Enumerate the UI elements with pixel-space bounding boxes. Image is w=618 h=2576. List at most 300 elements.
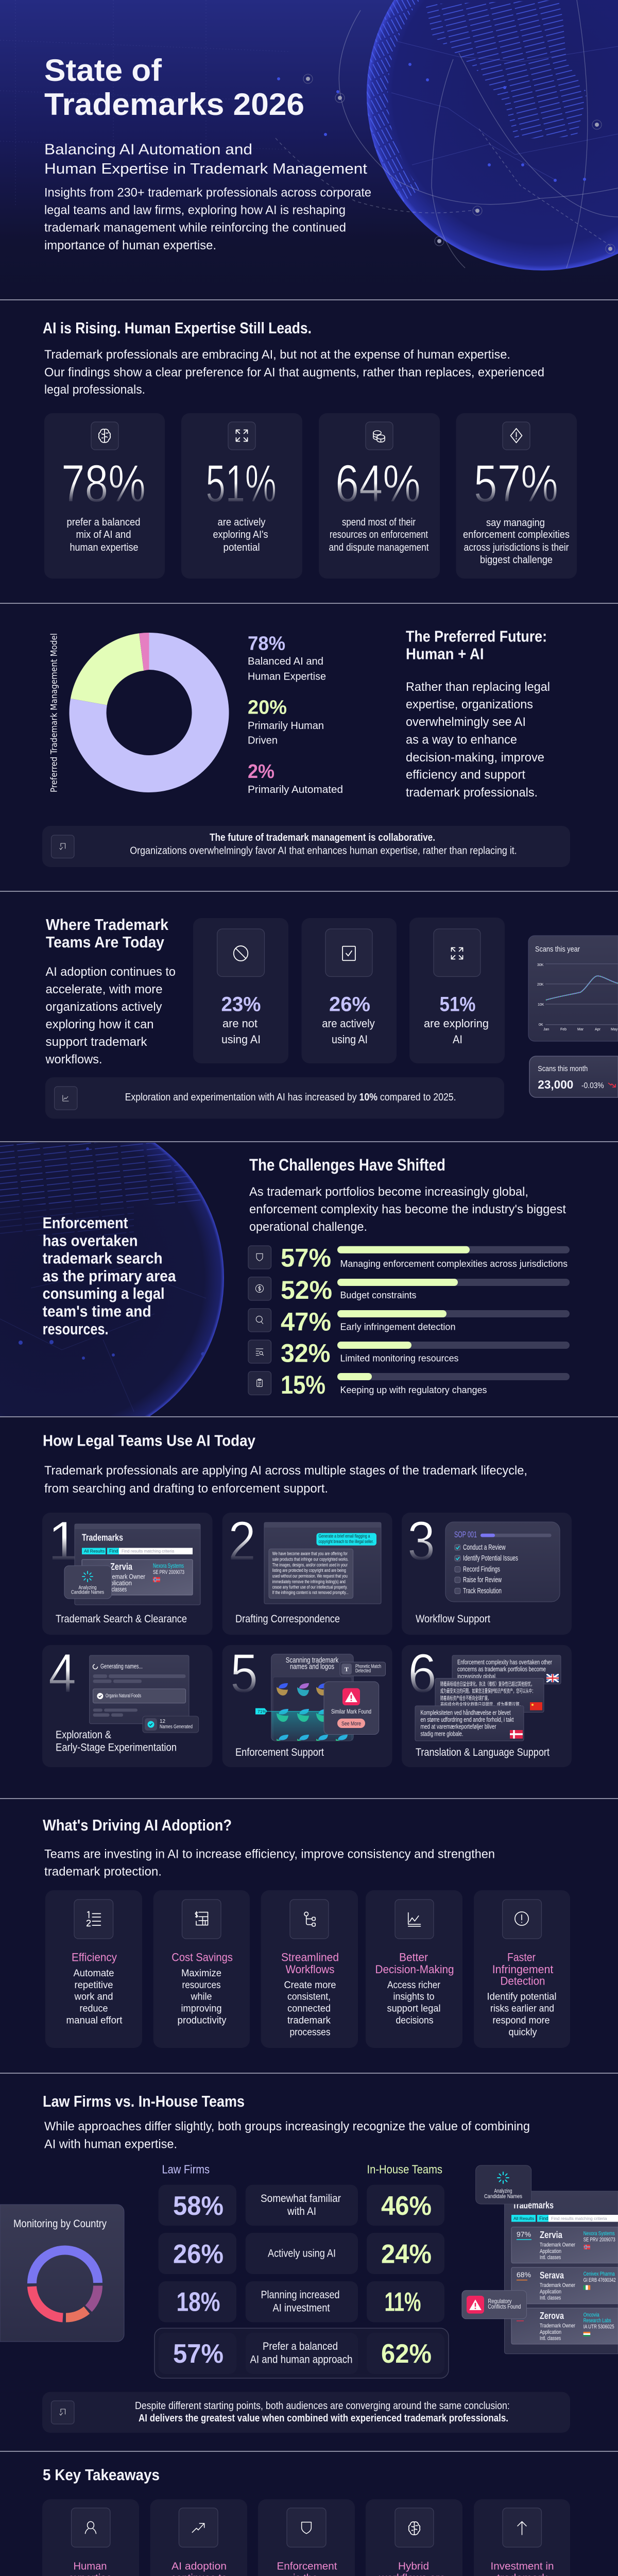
result: Zerova: Zerova	[540, 2311, 564, 2321]
widget: trademarks results list: All Results	[513, 2216, 534, 2221]
label: prefer a balanced	[67, 517, 140, 528]
row: planning increased investment	[159, 2281, 444, 2323]
legend: 2% automated	[248, 761, 343, 795]
hero subtitle	[44, 142, 367, 177]
card: 26% actively using AI: are actively	[322, 1017, 375, 1030]
icon: dollar	[255, 1285, 264, 1292]
use case 1: trademark search and clearance	[42, 1510, 212, 1635]
driver card: cost savings: productivity	[177, 2015, 227, 2026]
chip: phonetic match	[340, 1662, 385, 1676]
heading: where teams are today	[46, 916, 169, 951]
result: Zervia: 97%	[517, 2230, 531, 2239]
driver card: cost savings	[153, 1890, 250, 2048]
use case 2: drafting correspondence: 2	[228, 1510, 256, 1572]
row: somewhat familiar: 58%	[173, 2191, 224, 2221]
driver card: cost savings: Cost Savings	[171, 1951, 233, 1964]
row: somewhat familiar: Somewhat familiar	[261, 2193, 341, 2205]
widget: scans this year chart: Apr	[595, 1028, 601, 1031]
driver card: faster infringement detection: quickly	[509, 2027, 537, 2038]
chip: names generated: Names Generated	[160, 1724, 193, 1730]
icon: list search	[256, 1349, 264, 1355]
driver card: streamlined workflows: Workflows	[285, 1963, 335, 1976]
text: law firms vs in-house: AI with human expertise.	[44, 2138, 177, 2151]
callout: collaborative future	[42, 826, 570, 867]
overlay: analyzing candidate names	[476, 2165, 531, 2204]
bar row: 47% detection: 47%	[281, 1308, 331, 1336]
widget: monitoring by country: Monitoring by Country	[13, 2218, 107, 2230]
overlay: regulatory conflicts found: Regulatory	[488, 2298, 511, 2305]
driver card: streamlined workflows: processes	[289, 2027, 331, 2038]
driver card: cost savings: resources	[182, 1980, 220, 1991]
logo scan mockup: names and logos	[290, 1663, 334, 1671]
icon: down arrow	[608, 1083, 615, 1087]
text: preferred future: trademark professionals.	[406, 786, 538, 800]
text: what's driving adoption: Teams are investing in AI to increase efficiency, improve consistency and strengthen	[44, 1848, 495, 1861]
result: Zerova	[511, 2308, 618, 2344]
callout text: enforcement overtaken: trademark search	[43, 1249, 163, 1267]
heading: AI is rising: AI is Rising. Human Expertise Still Leads.	[43, 319, 312, 337]
use case 4: exploration: Exploration &	[56, 1729, 111, 1741]
widget: scans this month: 23,000	[538, 1078, 573, 1091]
driver card: efficiency: manual effort	[66, 2015, 123, 2026]
text: challenges: enforcement complexity has become the industry's biggest	[249, 1202, 566, 1216]
logo scan mockup: Scanning trademark	[286, 1656, 339, 1665]
logo scan mockup	[267, 1654, 353, 1748]
stat card: 78%	[44, 413, 165, 579]
overlay: analyzing	[64, 1566, 112, 1599]
takeaway card: human expertise	[42, 2499, 139, 2576]
bar row: 52% budget	[248, 1276, 570, 1304]
callout text: The future of trademark management is collaborative.	[210, 832, 435, 843]
legend: 78% balanced: Human Expertise	[248, 671, 326, 682]
driver card: faster infringement detection: Infringement	[492, 1963, 553, 1976]
screen mockup: SE PRV 2009073	[153, 1569, 184, 1575]
bar row: 57% enforcement complexities: Managing enforcement complexities across jurisdictions	[340, 1258, 568, 1269]
label	[67, 517, 140, 553]
icon: person	[85, 2521, 96, 2534]
name generator mockup: Organix Natural Foods	[106, 1693, 141, 1699]
bar row: 47% detection	[248, 1308, 570, 1336]
use case 5: enforcement support: Enforcement Support	[235, 1747, 324, 1758]
driver card: cost savings: improving	[181, 2004, 221, 2014]
use case 6: translation and language support: 6	[408, 1642, 437, 1704]
screen mockup: Nexora Systems	[153, 1562, 184, 1569]
chip: phonetic match: T	[345, 1666, 349, 1673]
bar row: 52% budget: 52%	[281, 1276, 332, 1304]
highlighted row: balanced approach: 57%	[173, 2339, 224, 2369]
use case 3: workflow support: Workflow Support	[416, 1613, 490, 1625]
use case 4: exploration	[42, 1642, 212, 1767]
use case 6: translation and language support: Translation & Language Support	[416, 1747, 550, 1758]
chat mockup: used without our permission. We request that you	[272, 1573, 348, 1579]
takeaway card: enforcement: Enforcement	[277, 2561, 337, 2572]
use case 3: workflow support: 3	[407, 1510, 435, 1572]
takeaway card: AI adoption	[150, 2499, 247, 2576]
takeaway card: human expertise: Human	[73, 2561, 107, 2572]
card: 51% exploring AI: AI	[453, 1033, 462, 1046]
driver card: efficiency: Automate	[73, 1968, 114, 1979]
translation panel: Chinese: 商标组合的全球化趋势日益明显，成为重要议题。	[440, 1701, 523, 1708]
legend: 78% balanced: 78%	[248, 633, 285, 654]
row: planning increased investment: 18%	[176, 2287, 220, 2317]
driver card: streamlined workflows: connected	[287, 2004, 331, 2014]
text: law firms vs in-house: While approaches differ slightly, both groups increasingly recognize the value of combining	[44, 2120, 530, 2133]
result: Zervia: Application	[540, 2248, 561, 2255]
driver card: faster infringement detection: Identify potential	[487, 1992, 556, 2003]
bar row: 32% monitoring: Limited monitoring resources	[340, 1353, 458, 1364]
icon: check box	[342, 946, 355, 960]
result: Serava: Trademark Owner	[540, 2282, 575, 2289]
text: where teams are today: accelerate, with more	[45, 982, 163, 996]
screen mockup: Trademark Owner	[101, 1573, 145, 1581]
translation panel: Danish: en større udfordring end andre forhold, i takt	[420, 1716, 514, 1723]
driver card: better decision-making: insights to	[393, 1992, 435, 2003]
legend: 78% balanced	[248, 633, 326, 682]
row: planning increased investment: Planning increased	[261, 2289, 340, 2301]
text: law firms vs in-house	[44, 2120, 530, 2151]
legend: 20% human driven: Primarily Human	[248, 720, 324, 732]
text: how legal teams use AI	[44, 1464, 527, 1496]
driver card: better decision-making	[366, 1890, 462, 2048]
takeaway card: enforcement	[258, 2499, 355, 2576]
overlay: analyzing: Candidate Names	[71, 1589, 104, 1595]
text: preferred future: Rather than replacing legal	[406, 680, 550, 694]
hero intro paragraph: Insights from 230+ trademark professionals across corporate	[44, 185, 371, 200]
row: actively using AI: Actively using AI	[268, 2247, 336, 2259]
result: Serava	[511, 2267, 618, 2304]
driver card: faster infringement detection	[474, 1890, 570, 2048]
icon: alert	[515, 1912, 528, 1925]
text: how legal teams use AI: Trademark professionals are applying AI across multiple stages of the trademark lifecycle,	[44, 1464, 527, 1478]
text: preferred future: efficiency and support	[406, 768, 525, 782]
bar row: 32% monitoring: 32%	[281, 1339, 330, 1368]
name generator mockup: Generating names...	[100, 1662, 143, 1670]
use case 2: drafting correspondence: Drafting Correspondence	[235, 1613, 340, 1625]
hero subtitle: Balancing AI Automation and	[44, 142, 252, 158]
highlighted row: balanced approach: Prefer a balanced	[263, 2341, 338, 2352]
row: actively using AI: 24%	[381, 2240, 432, 2269]
number: 64%: 64%	[335, 454, 421, 513]
hero title	[44, 53, 304, 122]
column header: law firms: Law Firms	[162, 2163, 210, 2176]
chat mockup: copyright breach to the illegal seller.	[318, 1539, 374, 1545]
hero title: Trademarks 2026	[44, 87, 304, 122]
text: where teams are today: workflows.	[45, 1053, 102, 1066]
name generator mockup	[90, 1655, 189, 1724]
hero intro paragraph	[44, 185, 371, 252]
highlighted row: balanced approach: 62%	[381, 2339, 432, 2369]
legend: 78% balanced: Balanced AI and	[248, 656, 323, 667]
icon: trending up	[192, 2523, 204, 2532]
hero section background	[0, 0, 618, 300]
driver card: faster infringement detection: Faster	[507, 1951, 536, 1964]
screen mockup: Intl. classes	[103, 1586, 127, 1593]
callout text: AI delivers the greatest value when combined with experienced trademark professionals.	[139, 2413, 508, 2424]
heading: what's driving adoption: What's Driving AI Adoption?	[43, 1816, 232, 1834]
intro text: AI is rising: Our findings show a clear preference for AI that augments, rather than replaces, experienced	[44, 366, 544, 379]
icon: coins	[373, 431, 385, 442]
chat mockup: The images, designs, and/or content used in your	[272, 1562, 348, 1568]
result: Zerova: Intl. classes	[540, 2335, 561, 2342]
widget: trademarks results list: Find results matching criteria	[551, 2216, 607, 2221]
result: Zerova: Oncovia	[583, 2312, 599, 2318]
overlay: analyzing candidate names: Analyzing	[494, 2188, 512, 2194]
checklist mockup: Track Resolution	[463, 1587, 502, 1595]
bar row: 15% regulatory: Keeping up with regulatory changes	[340, 1384, 487, 1395]
use case 5: enforcement support: 5	[230, 1642, 258, 1704]
legend: 2% automated: Primarily Automated	[248, 784, 343, 795]
number: 57%: 57%	[474, 454, 558, 513]
label: spend most of their	[342, 517, 416, 528]
use case 5: enforcement support	[222, 1642, 392, 1767]
widget: scans this month: -0.03%	[581, 1081, 604, 1090]
widget: scans this year chart: 20K	[537, 983, 544, 987]
hero intro paragraph: legal teams and law firms, exploring how AI is reshaping	[44, 204, 346, 217]
heading: 5 key takeaways: 5 Key Takeaways	[43, 2466, 160, 2484]
translation panel: Chinese: 成为最受关注的问题。如果您注重保护知识产权资产，您可以从中：	[440, 1688, 535, 1694]
callout: converging conclusion	[42, 2392, 570, 2433]
driver card: streamlined workflows	[261, 1890, 358, 2048]
driver card: efficiency	[45, 1890, 142, 2048]
text: where teams are today	[45, 965, 176, 1066]
overlay: similar mark found: See More	[341, 1721, 361, 1727]
driver card: streamlined workflows: trademark	[287, 2015, 331, 2026]
label: potential	[224, 542, 260, 553]
result: Zervia: Trademark Owner	[540, 2242, 575, 2248]
screen mockup: Trademarks	[82, 1533, 123, 1543]
card: 26% actively using AI: 26%	[329, 993, 370, 1016]
card: 51% exploring AI: 51%	[440, 993, 476, 1016]
widget: scans this year chart	[528, 936, 618, 1041]
chat mockup: Generate a brief email flagging a	[318, 1534, 370, 1539]
icon: line chart	[408, 1912, 420, 1926]
icon: search	[256, 1316, 263, 1324]
row: somewhat familiar: with AI	[287, 2206, 316, 2217]
label: resources on enforcement	[330, 529, 428, 540]
callout text: enforcement overtaken	[43, 1214, 176, 1338]
chat mockup: If the infringing content is not removed promptly...	[272, 1590, 349, 1596]
use case 4: exploration: 4	[48, 1642, 76, 1704]
card: 23% not using AI	[193, 918, 288, 1063]
result: Zerova: Application	[540, 2329, 561, 2335]
result: Zervia: Zervia	[540, 2230, 563, 2240]
chat mockup: listing are protected by copyright and are being	[272, 1568, 346, 1573]
text: preferred future: decision-making, improve	[406, 751, 544, 765]
overlay: regulatory conflicts found	[462, 2291, 526, 2319]
screen mockup: Application	[103, 1580, 132, 1587]
widget: trademarks results list: Find	[539, 2216, 548, 2221]
checklist mockup	[445, 1522, 560, 1602]
bar row: 15% regulatory	[248, 1370, 570, 1399]
heading: law firms vs in-house: Law Firms vs. In-House Teams	[43, 2092, 245, 2110]
driver card: streamlined workflows: consistent,	[287, 1992, 331, 2003]
widget: monitoring by country	[0, 2205, 124, 2342]
widget: scans this year chart: 30K	[537, 963, 544, 967]
callout text: enforcement overtaken: resources.	[43, 1320, 109, 1338]
result: Zervia	[511, 2227, 618, 2263]
globe illustration: challenges section	[0, 1143, 224, 1416]
takeaway card: investment	[474, 2499, 570, 2576]
bar row: 57% enforcement complexities	[248, 1243, 570, 1272]
result: Zervia: Intl. classes	[540, 2255, 561, 2261]
card: 23% not using AI: using AI	[221, 1033, 261, 1046]
widget: scans this year chart: Jan	[543, 1028, 549, 1031]
stat card: 64%	[319, 413, 440, 579]
driver card: efficiency: reduce	[79, 2004, 108, 2014]
callout text: enforcement overtaken: Enforcement	[43, 1214, 128, 1232]
heading: where teams are today: Where Trademark	[46, 916, 169, 934]
card: 51% exploring AI: are exploring	[424, 1017, 489, 1030]
row: somewhat familiar	[159, 2185, 444, 2226]
chip: names generated: 12	[160, 1719, 166, 1724]
text: challenges: operational challenge.	[249, 1220, 367, 1234]
driver card: faster infringement detection: respond more	[492, 2015, 550, 2026]
text: preferred future: as a way to enhance	[406, 733, 517, 747]
callout text: Despite different starting points, both audiences are converging around the same conclusion:	[135, 2400, 510, 2412]
translation panel: English: Enforcement complexity has overtaken other	[457, 1658, 552, 1666]
row: actively using AI: 26%	[173, 2240, 224, 2269]
marker: 71%	[255, 1708, 267, 1715]
heading: preferred future	[406, 628, 547, 663]
checklist mockup: Record Findings	[463, 1565, 500, 1573]
driver card: faster infringement detection: risks earlier and	[490, 2004, 554, 2014]
heading: where teams are today: Teams Are Today	[46, 933, 165, 951]
screen mockup: Zervia	[110, 1562, 133, 1572]
driver card: efficiency: work and	[74, 1992, 113, 2003]
widget: scans this year chart: 0K	[539, 1023, 543, 1027]
screen mockup: All Results	[84, 1549, 105, 1554]
heading: how legal teams use AI: How Legal Teams Use AI Today	[43, 1431, 256, 1450]
heading: preferred future: The Preferred Future:	[406, 628, 547, 645]
icon: brain	[409, 2522, 420, 2535]
overlay: regulatory conflicts found: Conflicts Found	[488, 2303, 521, 2310]
label: biggest challenge	[480, 554, 553, 566]
icon: chart	[63, 1095, 68, 1101]
bar row: 32% monitoring	[248, 1339, 570, 1368]
overlay: analyzing: Analyzing	[78, 1585, 97, 1591]
label: enforcement complexities	[463, 529, 570, 540]
callout: exploration increase: Exploration and experimentation with AI has increased by 10% compared to 2025.	[125, 1092, 456, 1103]
icon: expand	[451, 948, 462, 959]
checklist mockup: SOP 001	[454, 1530, 477, 1539]
translation panel: English: increasingly global.	[457, 1672, 496, 1680]
label: across jurisdictions is their	[464, 542, 569, 553]
icon: clipboard	[257, 1379, 262, 1387]
driver card: faster infringement detection: Detection	[501, 1975, 545, 1988]
card: 51% exploring AI	[409, 918, 505, 1063]
translation panel: Danish: med at varemærkeporteføljer bliver	[420, 1723, 496, 1731]
widget: scans this year chart: 10K	[538, 1003, 544, 1007]
checklist mockup: Conduct a Review	[463, 1544, 506, 1552]
icon: flow	[304, 1912, 315, 1926]
intro text: AI is rising	[44, 348, 544, 397]
bar row: 15% regulatory: 15%	[281, 1370, 325, 1399]
label: mix of AI and	[76, 529, 131, 540]
legend: 2% automated: 2%	[248, 761, 274, 783]
result: Serava: Intl. classes	[540, 2295, 561, 2301]
use case 6: translation and language support	[402, 1642, 572, 1767]
icon: arrow up	[518, 2521, 526, 2535]
checklist mockup: Raise for Review	[463, 1576, 502, 1584]
callout text: enforcement overtaken: team's time and	[43, 1302, 151, 1320]
translation panel: English: concerns as trademark portfolios become	[457, 1665, 546, 1673]
row: planning increased investment: 11%	[384, 2287, 421, 2317]
screen mockup: Find	[109, 1549, 118, 1554]
callout text: enforcement overtaken: has overtaken	[43, 1231, 138, 1250]
overlay: analyzing candidate names: Candidate Names	[484, 2194, 522, 2200]
label: human expertise	[70, 542, 138, 553]
hero globe illustration	[276, 0, 618, 270]
text: preferred future	[406, 680, 550, 800]
donut: by country	[32, 2250, 98, 2317]
takeaway card: investment: Investment in	[490, 2561, 554, 2572]
icon: note	[60, 843, 65, 850]
driver card: cost savings: Maximize	[181, 1968, 221, 1979]
intro text: AI is rising: Trademark professionals are embracing AI, but not at the expense of human expertise.	[44, 348, 510, 362]
text: challenges	[249, 1185, 566, 1234]
use case 4: exploration: Early-Stage Experimentation	[56, 1742, 177, 1754]
text: how legal teams use AI: from searching and drafting to enforcement support.	[44, 1482, 328, 1496]
takeaway card: hybrid workflows: Hybrid	[398, 2561, 429, 2572]
icon: numbered list	[87, 1911, 100, 1926]
translation panel: Chinese	[435, 1679, 544, 1713]
chat mockup: immediately remove the infringing listing(s) and	[272, 1579, 346, 1585]
stat card: 51%	[181, 413, 302, 579]
translation panel: Danish	[415, 1706, 524, 1741]
use case 3: workflow support	[402, 1510, 572, 1635]
stat card: 57%	[456, 413, 577, 579]
use case 1: trademark search and clearance: Trademark Search & Clearance	[56, 1613, 187, 1625]
legend: 20% human driven: Driven	[248, 735, 278, 746]
bar row: 57% enforcement complexities: 57%	[281, 1243, 331, 1272]
text: where teams are today: organizations actively	[45, 1000, 162, 1014]
donut chart: preferred model	[70, 633, 229, 792]
takeaway card: hybrid workflows	[366, 2499, 462, 2576]
label: say managing	[486, 517, 545, 529]
result: Serava: Serava	[540, 2270, 564, 2281]
widget: scans this year chart: Mar	[577, 1028, 584, 1031]
label	[329, 517, 429, 553]
row: actively using AI	[159, 2233, 444, 2274]
icon: cost	[195, 1911, 208, 1925]
chart axis title: Preferred Trademark Management Model	[49, 633, 60, 792]
icon: shield	[302, 2522, 311, 2534]
text: preferred future: overwhelmingly see AI	[406, 715, 526, 729]
hero subtitle: Human Expertise in Trademark Management	[44, 161, 367, 177]
hero intro paragraph: trademark management while reinforcing the continued	[44, 221, 346, 235]
heading: preferred future: Human + AI	[406, 645, 484, 663]
bar row: 52% budget: Budget constraints	[340, 1290, 416, 1300]
highlighted row: balanced approach: AI and human approach	[250, 2353, 352, 2366]
driver card: efficiency: repetitive	[74, 1980, 113, 1991]
hero title: State of	[44, 53, 162, 88]
result: Serava: 68%	[517, 2270, 531, 2279]
checklist mockup: Identify Potential Issues	[463, 1554, 518, 1563]
widget: trademarks results list	[505, 2191, 618, 2354]
text: what's driving adoption	[44, 1848, 495, 1879]
icon: ban	[234, 946, 248, 961]
label: and dispute management	[329, 542, 429, 553]
icon: note	[60, 2409, 65, 2415]
callout: exploration increase	[45, 1077, 504, 1118]
takeaway card: AI adoption: AI adoption	[171, 2561, 227, 2572]
use case 1: trademark search and clearance: 1	[48, 1510, 79, 1572]
chat mockup: cease any further use of our intellectual property.	[272, 1585, 348, 1590]
driver card: better decision-making: decisions	[396, 2015, 434, 2026]
chip: names generated	[143, 1716, 199, 1733]
card: 26% actively using AI: using AI	[332, 1033, 368, 1046]
marker: 71%: 71%	[258, 1709, 266, 1714]
